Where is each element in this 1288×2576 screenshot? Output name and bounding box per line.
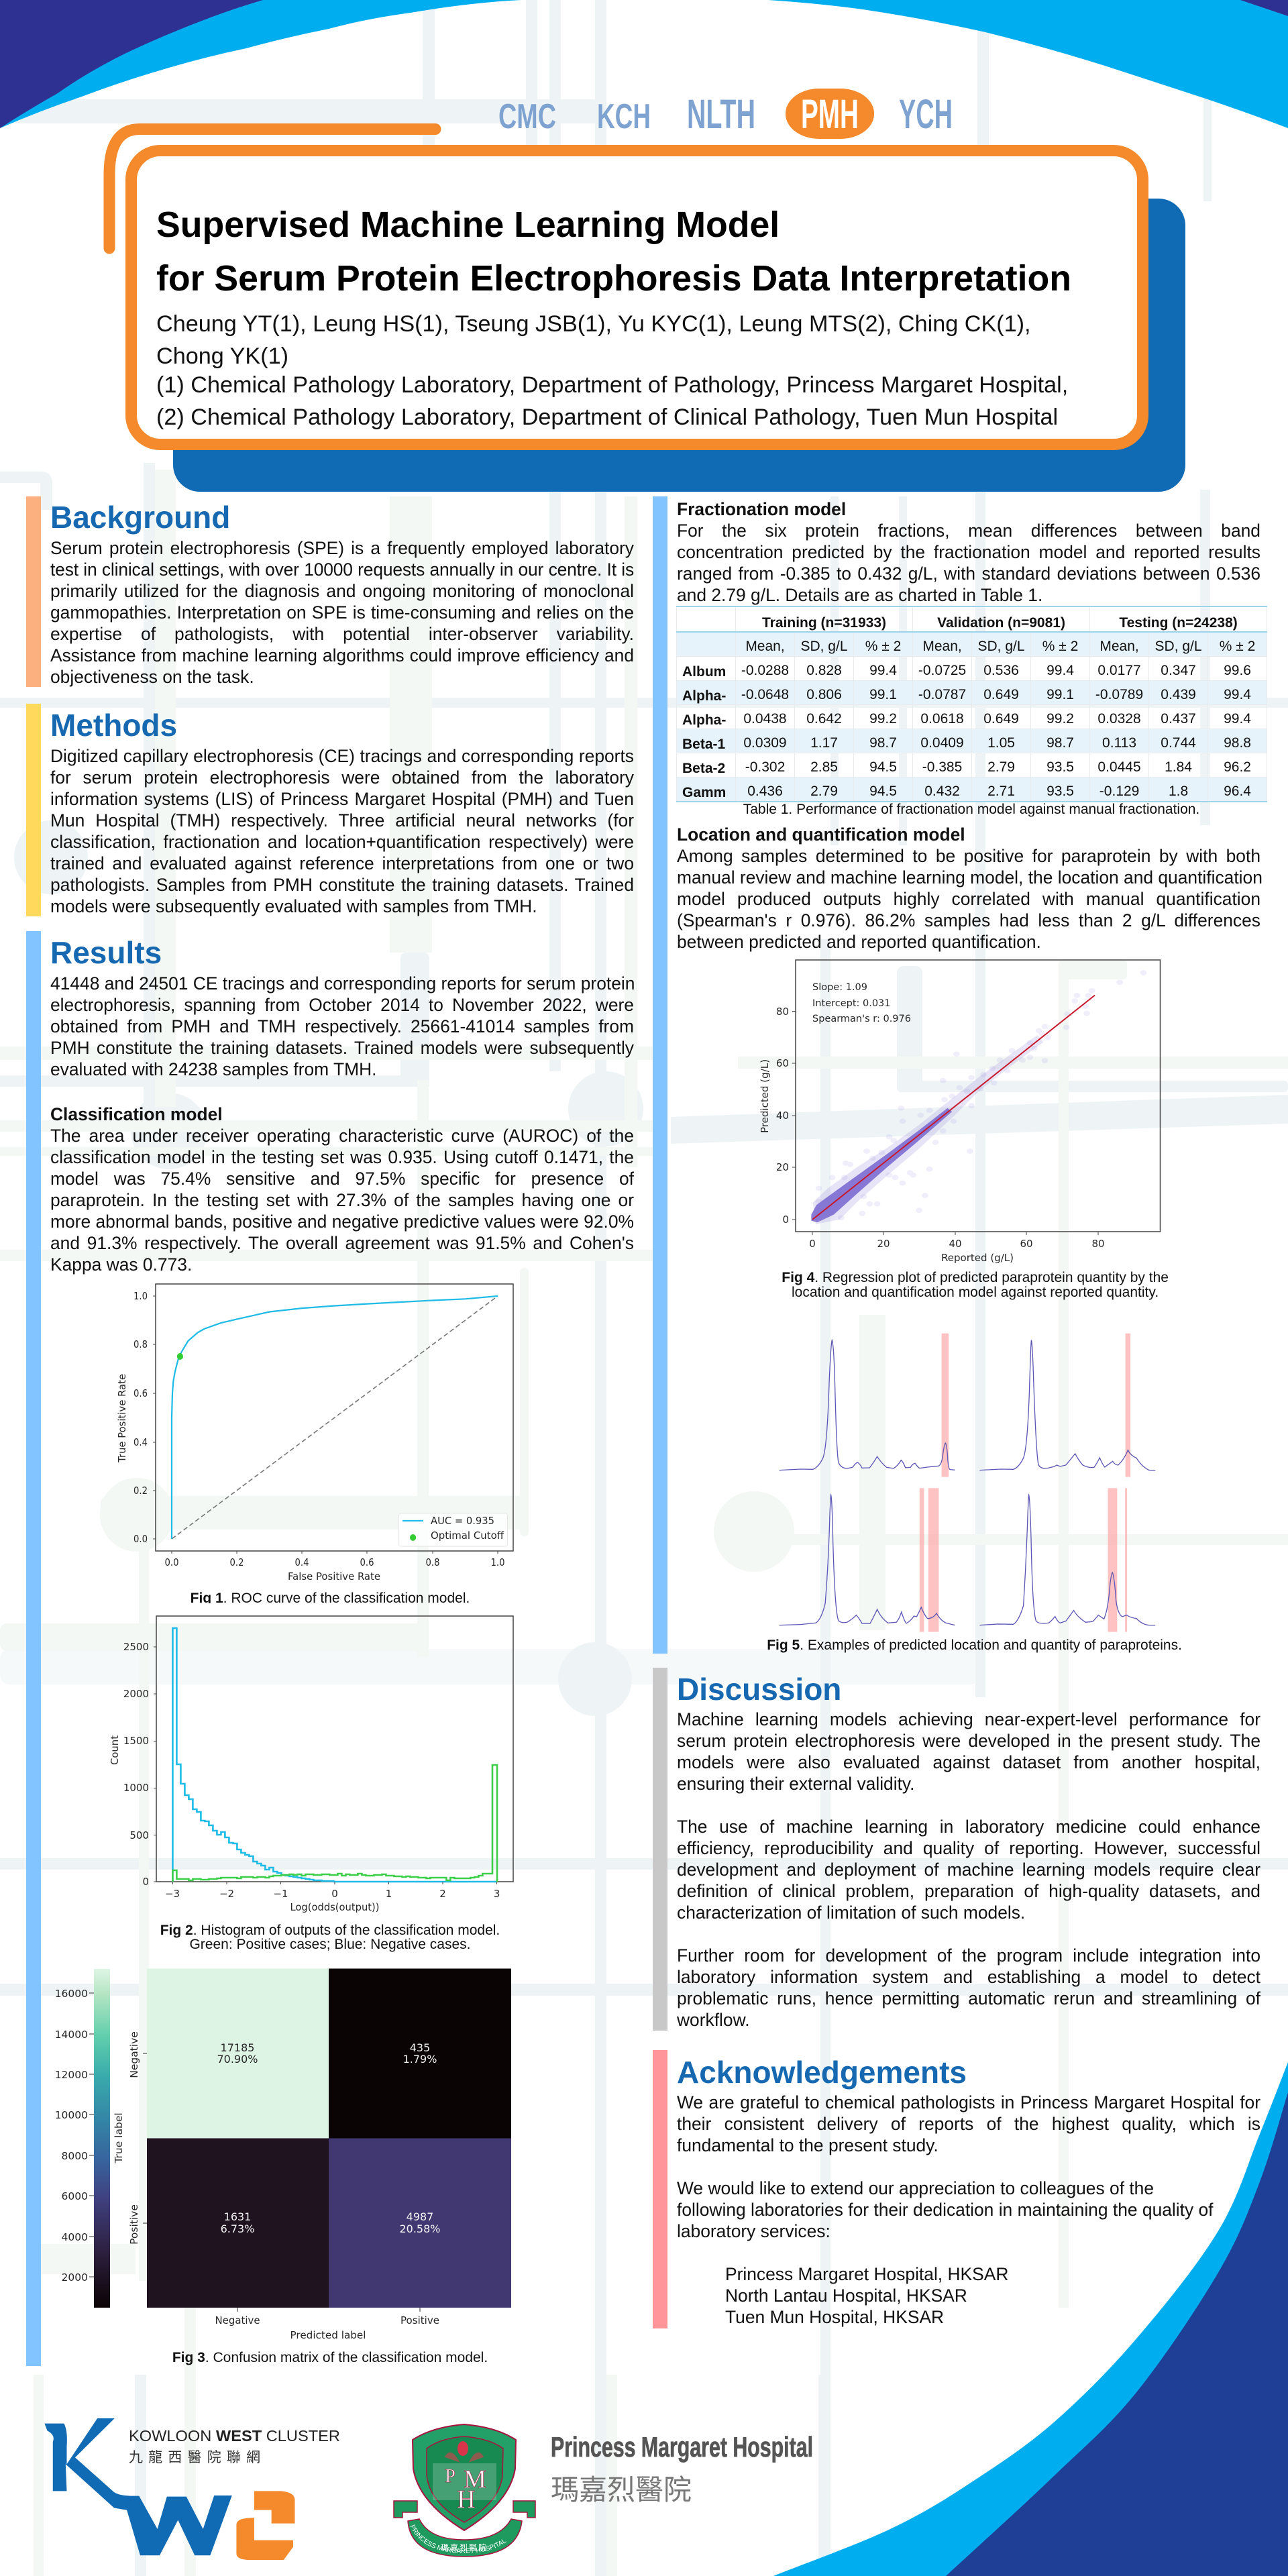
fractionation model text: and 2.79 g/L. Details are as charted in Table 1. — [677, 585, 1042, 605]
logo: Princess Margaret Hospital crest: M — [464, 2465, 486, 2493]
chart: confusion matrix figure 3: Positive — [128, 2204, 140, 2245]
table 1: 99.6 — [1224, 663, 1251, 678]
table 1: 0.0618 — [920, 711, 964, 726]
methods text — [50, 746, 634, 916]
discussion text: efficiency, reproducibility and quality of reporting. However, successful — [677, 1838, 1260, 1858]
background text: test in clinical settings, with over 10000 requests annually in our centre. It is — [50, 559, 634, 580]
table 1: Mean, — [922, 639, 962, 654]
colour bar: 8000 — [62, 2150, 88, 2162]
chart: ROC curve figure 1: True Positive Rate — [116, 1374, 128, 1463]
table 1: SD, g/L — [978, 639, 1025, 654]
acknowledgements text: North Lantau Hospital, HKSAR — [725, 2286, 967, 2306]
chart: histogram figure 2: 2 — [439, 1888, 446, 1900]
table 1: Alpha- — [682, 688, 726, 703]
table 1: 99.1 — [869, 687, 897, 702]
classification model text: more abnormal bands, positive and negative predictive values were 92.0% — [50, 1212, 634, 1232]
chart: regression plot figure 4: 20 — [776, 1161, 789, 1173]
chart: confusion matrix figure 3: True label — [113, 2112, 125, 2164]
discussion text: development and deployment of machine learning models require clear — [677, 1860, 1260, 1880]
chart: regression plot figure 4: 20 — [877, 1238, 890, 1250]
discussion text: The use of machine learning in laboratory medicine could enhance — [677, 1817, 1260, 1837]
chart: ROC curve figure 1: 0.8 — [425, 1556, 440, 1568]
table 1: Mean, — [1099, 639, 1139, 654]
methods text: models were subsequently evaluated with samples from TMH. — [50, 896, 537, 916]
predicted paraprotein bands — [920, 1334, 1130, 1632]
chart: regression plot figure 4 — [759, 959, 1169, 1300]
scatter points — [811, 970, 1146, 1224]
chart: regression plot figure 4: Slope: 1.09 — [812, 982, 867, 993]
fractionation model text: Fractionation model — [677, 499, 846, 519]
colour bar: 16000 — [55, 1988, 88, 2000]
chart: ROC curve figure 1: 0.2 — [229, 1556, 244, 1568]
title — [156, 205, 1071, 299]
logo: Princess Margaret Hospital crest: 瑪嘉烈醫院 — [441, 2542, 488, 2553]
results text: evaluated with 24238 samples from TMH. — [50, 1059, 377, 1079]
table 1: 2.79 — [987, 759, 1015, 774]
chart: confusion matrix figure 3: Negative — [128, 2031, 140, 2078]
table 1: SD, g/L — [1155, 639, 1202, 654]
acknowledgements text: We would like to extend our appreciation to colleagues of the — [677, 2178, 1154, 2198]
table 1 — [676, 606, 1267, 802]
chart: histogram figure 2 — [109, 1615, 514, 1952]
legend: Optimal Cutoff — [431, 1529, 504, 1542]
acknowledgements text: laboratory services: — [677, 2221, 830, 2241]
matrix cells: 70.90% — [217, 2053, 258, 2065]
table 1: 99.2 — [1046, 711, 1074, 726]
logo: Kowloon West Cluster: 九龍西醫院聯網 — [129, 2447, 260, 2467]
table 1: -0.0787 — [918, 687, 966, 702]
panel: methods — [26, 704, 634, 916]
chart: ROC curve figure 1: 0.0 — [165, 1556, 178, 1568]
table 1: 2.85 — [810, 759, 838, 774]
table 1: 1.84 — [1165, 759, 1192, 774]
discussion text: characterization of limitation of such models. — [677, 1902, 1025, 1923]
chart: regression plot figure 4: 40 — [949, 1238, 962, 1250]
caption: Green: Positive cases; Blue: Negative cases. — [189, 1937, 471, 1952]
chart: ROC curve figure 1 — [116, 1283, 514, 1603]
panel: results right — [653, 496, 1267, 1654]
chart: histogram figure 2: 2500 — [123, 1641, 149, 1653]
table 1: 96.4 — [1224, 784, 1251, 798]
ROC line — [172, 1296, 498, 1539]
location and quantification text: manual review and machine learning model, the location and quantification — [677, 867, 1263, 888]
table 1: 0.806 — [806, 687, 842, 702]
affiliations: (2) Chemical Pathology Laboratory, Department of Clinical Pathology, Tuen Mun Hospital — [156, 405, 1058, 430]
hospital navigation tabs: NLTH — [687, 91, 755, 137]
fractionation model text: concentration predicted by the fractionation model and reported results — [677, 542, 1260, 562]
chart: regression plot figure 4: 80 — [776, 1006, 789, 1018]
results text: 41448 and 24501 CE tracings and corresponding reports for serum protein — [50, 973, 635, 994]
discussion text — [677, 1709, 1260, 2030]
chart: regression plot figure 4: Intercept: 0.031 — [812, 998, 891, 1009]
table 1: 0.649 — [983, 711, 1019, 726]
classification model text: and 91.3% respectively. The overall agreement was 91.5% and Cohen's — [50, 1233, 634, 1253]
background text: expertise of pathologists, with potential inter-observer variability. — [50, 624, 634, 644]
blue backing panel behind title — [173, 199, 1185, 492]
title: Supervised Machine Learning Model — [156, 205, 780, 245]
table 1: 1.8 — [1169, 784, 1188, 798]
table 1: 99.4 — [1224, 687, 1251, 702]
chart: ROC curve figure 1: 0.0 — [133, 1533, 148, 1545]
chart: ROC curve figure 1: False Positive Rate — [288, 1570, 380, 1582]
table 1: 0.744 — [1161, 735, 1196, 750]
matrix cells — [147, 1968, 511, 2308]
top-right corner swoosh — [768, 0, 1288, 128]
table 1: Album — [682, 664, 726, 679]
discussion text: laboratory information system and establishing a model to detect — [677, 1967, 1260, 1987]
table 1: 0.432 — [924, 784, 960, 798]
chart: histogram figure 2: Count — [109, 1735, 121, 1765]
logo: Princess Margaret Hospital crest — [393, 2424, 536, 2557]
table 1: -0.302 — [745, 759, 785, 774]
methods text: pathologists. Samples from PMH constitute the training datasets. Trained — [50, 875, 634, 895]
bottom-right corner swoosh — [773, 2062, 1288, 2576]
chart: histogram figure 2: 0 — [142, 1876, 149, 1888]
colour bar: 14000 — [55, 2029, 88, 2041]
table 1: 96.2 — [1224, 759, 1251, 774]
caption: Fig 5. Examples of predicted location and quantity of paraproteins. — [767, 1638, 1182, 1653]
positive cases histogram — [172, 1765, 497, 1882]
table 1: 1.05 — [987, 735, 1015, 750]
table 1: 0.0177 — [1097, 663, 1141, 678]
background text: primarily utilized for the diagnosis and ongoing monitoring of monoclonal — [50, 581, 634, 601]
location and quantification text: (Spearman's r 0.976). 86.2% samples had less than 2 g/L differences — [677, 910, 1260, 930]
location and quantification text: model produced outputs highly correlated with manual quantification — [677, 889, 1260, 909]
table 1: Training (n=31933) — [762, 615, 886, 631]
title panel — [125, 145, 1148, 450]
methods text: for serum protein electrophoresis were obtained from the laboratory — [50, 767, 634, 788]
methods text: Mun Hospital (TMH) respectively. Three artificial neural networks (for — [50, 810, 634, 830]
chart: histogram figure 2: 1500 — [123, 1735, 149, 1747]
table 1: Beta-2 — [682, 761, 725, 775]
fractionation model text: ranged from -0.385 to 0.432 g/L, with standard deviations between 0.536 — [677, 564, 1260, 584]
chart: regression plot figure 4: 0 — [782, 1214, 789, 1226]
heading: acknowledgements: Acknowledgements — [677, 2055, 967, 2090]
table 1: Gamm — [682, 785, 726, 800]
chart: ROC curve figure 1: 0.4 — [295, 1556, 309, 1568]
table 1: Alpha- — [682, 712, 726, 727]
table 1: 99.4 — [1046, 663, 1074, 678]
table 1: 93.5 — [1046, 759, 1074, 774]
classification model text — [50, 1104, 634, 1275]
table 1: -0.129 — [1099, 784, 1139, 798]
discussion text: Further room for development of the program include integration into — [677, 1945, 1260, 1966]
caption — [160, 1923, 500, 1952]
table 1: SD, g/L — [800, 639, 848, 654]
background text — [50, 538, 634, 687]
table 1: 2.79 — [810, 784, 838, 798]
classification model text: The area under receiver operating characteristic curve (AUROC) of the — [50, 1126, 634, 1146]
chart: regression plot figure 4: 80 — [1091, 1238, 1105, 1250]
logo: Kowloon West Cluster — [44, 2418, 340, 2560]
acknowledgements text: We are grateful to chemical pathologists in Princess Margaret Hospital for — [677, 2092, 1260, 2112]
table 1: Testing (n=24238) — [1119, 615, 1238, 631]
table 1: 0.536 — [983, 663, 1019, 678]
chart: histogram figure 2: 500 — [129, 1829, 149, 1841]
table 1: -0.0725 — [918, 663, 966, 678]
classification model text: classification model in the testing set was 0.935. Using cutoff 0.1471, the — [50, 1147, 634, 1167]
fractionation model text: For the six protein fractions, mean differences between band — [677, 521, 1260, 541]
location and quantification text — [677, 824, 1263, 952]
location and quantification text: Location and quantification model — [677, 824, 965, 845]
results text: electrophoresis, spanning from October 2014 to November 2022, were — [50, 995, 634, 1015]
legend: AUC = 0.935 — [431, 1515, 494, 1527]
chart: regression plot figure 4: 60 — [776, 1057, 789, 1069]
chart: regression plot figure 4: Predicted (g/L) — [759, 1059, 771, 1133]
affiliations — [156, 372, 1068, 430]
chart: regression plot figure 4: 40 — [776, 1110, 789, 1122]
table 1: 0.437 — [1161, 711, 1196, 726]
table 1: Beta-1 — [682, 737, 725, 751]
table 1: 0.649 — [983, 687, 1019, 702]
colour bar — [55, 1969, 110, 2308]
classification model text: Kappa was 0.773. — [50, 1254, 192, 1275]
table 1: Mean, — [745, 639, 785, 654]
classification model text: Classification model — [50, 1104, 223, 1124]
chart: ROC curve figure 1: 1.0 — [491, 1556, 504, 1568]
discussion text: definition of clinical problem, preparation of high-quality datasets, and — [677, 1881, 1260, 1901]
chart: histogram figure 2: 2000 — [123, 1688, 149, 1700]
caption: Fig 2. Histogram of outputs of the classification model. — [160, 1923, 500, 1938]
heading: background: Background — [50, 500, 230, 535]
table 1: 0.828 — [806, 663, 842, 678]
heading: discussion: Discussion — [677, 1672, 841, 1707]
panel: discussion — [653, 1668, 1260, 2031]
legend — [398, 1513, 507, 1546]
chart: regression plot figure 4: 60 — [1020, 1238, 1033, 1250]
hospital navigation tabs: PMH — [801, 91, 859, 137]
table 1: 98.7 — [869, 735, 897, 750]
colour bar: 6000 — [62, 2190, 88, 2202]
acknowledgements text: Tuen Mun Hospital, HKSAR — [725, 2307, 944, 2327]
chart: confusion matrix figure 3: Predicted label — [290, 2329, 366, 2341]
table 1: 0.0438 — [743, 711, 787, 726]
table 1: 99.1 — [1046, 687, 1074, 702]
acknowledgements text: Princess Margaret Hospital, HKSAR — [725, 2264, 1008, 2284]
chart: ROC curve figure 1: 0.8 — [133, 1338, 148, 1350]
table 1: % ± 2 — [1042, 639, 1078, 654]
table 1: % ± 2 — [1220, 639, 1255, 654]
acknowledgements text: following laboratories for their dedication in maintaining the quality of — [677, 2200, 1214, 2220]
chart: histogram figure 2: 1000 — [123, 1782, 149, 1794]
chart: confusion matrix figure 3: Positive — [400, 2314, 439, 2326]
classification model text: model was 75.4% sensitive and 97.5% specific for presence of — [50, 1169, 634, 1189]
background text: Assistance from machine learning algorithms could improve efficiency and — [50, 645, 634, 665]
table 1: 0.113 — [1102, 735, 1136, 750]
table 1: -0.385 — [922, 759, 962, 774]
caption: location and quantification model against reported quantity. — [792, 1285, 1159, 1300]
hospital name text — [551, 2432, 813, 2506]
table 1: -0.0648 — [741, 687, 789, 702]
discussion text: models were also evaluated against dataset from another hospital, — [677, 1752, 1260, 1772]
acknowledgements text: fundamental to the present study. — [677, 2135, 938, 2155]
chart: histogram figure 2: 1 — [386, 1888, 392, 1900]
table 1: 0.0409 — [920, 735, 964, 750]
chart: histogram figure 2: Log(odds(output)) — [290, 1901, 380, 1913]
table 1: -0.0789 — [1095, 687, 1143, 702]
caption — [782, 1270, 1169, 1300]
table 1: Validation (n=9081) — [937, 615, 1065, 631]
discussion text: serum protein electrophoresis were developed in the present study. The — [677, 1731, 1260, 1751]
hospital navigation tabs: CMC — [498, 97, 556, 136]
heading: methods: Methods — [50, 708, 177, 743]
colour bar: 10000 — [55, 2109, 88, 2121]
results text: PMH constitute the training datasets. Trained models were subsequently — [50, 1038, 634, 1058]
location and quantification text: Among samples determined to be positive for paraprotein by with both — [677, 846, 1260, 866]
chart: example tracings figure 5 — [767, 1334, 1182, 1653]
authors — [156, 311, 1031, 369]
table 1: 0.642 — [806, 711, 842, 726]
table 1: 94.5 — [869, 784, 897, 798]
matrix cells: 4987 — [407, 2210, 433, 2223]
authors: Cheung YT(1), Leung HS(1), Tseung JSB(1), Yu KYC(1), Leung MTS(2), Ching CK(1), — [156, 311, 1031, 337]
table 1: -0.0288 — [741, 663, 789, 678]
table 1: 99.4 — [869, 663, 897, 678]
table 1: 0.439 — [1161, 687, 1196, 702]
colour bar: 4000 — [62, 2231, 88, 2243]
matrix cells: 435 — [410, 2041, 430, 2054]
chart: histogram figure 2: 0 — [331, 1888, 338, 1900]
table 1: 99.4 — [1224, 711, 1251, 726]
colour bar: 2000 — [62, 2271, 88, 2284]
table 1: 93.5 — [1046, 784, 1074, 798]
table 1: 94.5 — [869, 759, 897, 774]
table 1: % ± 2 — [865, 639, 901, 654]
discussion text: workflow. — [677, 2010, 750, 2030]
discussion text: Machine learning models achieving near-expert-level performance for — [677, 1709, 1260, 1729]
logo: Princess Margaret Hospital crest: H — [457, 2485, 476, 2514]
chart: regression plot figure 4: Spearman's r: 0.976 — [812, 1014, 911, 1024]
matrix cells: 6.73% — [221, 2222, 254, 2235]
table 1: 98.8 — [1224, 735, 1251, 750]
chart: histogram figure 2: −3 — [165, 1888, 180, 1900]
table 1: 2.71 — [987, 784, 1015, 798]
table 1: 98.7 — [1046, 735, 1074, 750]
heading: results: Results — [50, 935, 162, 970]
orange accent stroke — [103, 123, 441, 254]
regression line — [812, 996, 1095, 1220]
panel: results left — [26, 931, 635, 2366]
top-left corner swoosh — [0, 0, 521, 128]
chart: ROC curve figure 1: 0.6 — [133, 1387, 148, 1399]
logo: Princess Margaret Hospital crest: PRINCESS MARGARET HOSPITAL — [411, 2524, 506, 2553]
chart: histogram figure 2: 3 — [494, 1888, 500, 1900]
chart: histogram figure 2: −1 — [273, 1888, 288, 1900]
caption: Fig 3. Confusion matrix of the classification model. — [172, 2350, 488, 2365]
classification model text: paraprotein. In the testing set with 27.3% of the samples having one or — [50, 1190, 634, 1210]
discussion text: problematic runs, hence permitting automatic rerun and streamlining of — [677, 1988, 1260, 2008]
hospital navigation tabs: KCH — [597, 97, 651, 136]
negative cases histogram — [172, 1628, 497, 1882]
table 1: 1.17 — [810, 735, 838, 750]
colour bar: 12000 — [55, 2069, 88, 2081]
chart: confusion matrix figure 3 — [55, 1968, 511, 2365]
matrix cells: 17185 — [221, 2041, 254, 2054]
table 1: 99.2 — [869, 711, 897, 726]
methods text: trained and evaluated against reference interpretations from one or two — [50, 853, 634, 873]
panel: acknowledgements — [653, 2050, 1260, 2328]
background text: gammopathies. Interpretation on SPE is time-consuming and relies on the — [50, 602, 634, 623]
panel: background — [26, 496, 634, 687]
logo: Princess Margaret Hospital crest: P — [445, 2466, 455, 2487]
matrix cells: 1631 — [224, 2210, 251, 2223]
results text — [50, 973, 635, 1079]
title: for Serum Protein Electrophoresis Data Interpretation — [156, 258, 1071, 299]
fractionation model text — [677, 499, 1260, 605]
chart: ROC curve figure 1: 0.6 — [360, 1556, 374, 1568]
methods text: information systems (LIS) of Princess Margaret Hospital (PMH) and Tuen — [50, 789, 634, 809]
table 1: 0.347 — [1161, 663, 1196, 678]
matrix cells: 20.58% — [399, 2222, 441, 2235]
acknowledgements text: their consistent delivery of reports of the highest quality, which is — [677, 2114, 1260, 2134]
methods text: Digitized capillary electrophoresis (CE) tracings and corresponding reports — [50, 746, 634, 766]
hospital navigation tabs — [498, 89, 953, 139]
acknowledgements text — [677, 2092, 1260, 2327]
tracings — [780, 1340, 1155, 1625]
table 1: 0.0328 — [1097, 711, 1141, 726]
table caption: Table 1. Performance of fractionation model against manual fractionation. — [743, 802, 1199, 817]
methods text: classification, fractionation and location+quantification respectively) were — [50, 832, 634, 852]
chart: histogram figure 2: −2 — [219, 1888, 234, 1900]
chart: ROC curve figure 1: 0.2 — [133, 1485, 148, 1497]
chart: confusion matrix figure 3: Negative — [215, 2314, 260, 2326]
background text: Serum protein electrophoresis (SPE) is a frequently employed laboratory — [50, 538, 634, 558]
table 1: 0.436 — [747, 784, 783, 798]
discussion text: ensuring their external validity. — [677, 1774, 915, 1794]
table 1: 0.0309 — [743, 735, 787, 750]
matrix cells: 1.79% — [403, 2053, 437, 2065]
authors: Chong YK(1) — [156, 343, 288, 369]
table 1: 0.0445 — [1097, 759, 1141, 774]
chart: ROC curve figure 1: 1.0 — [133, 1290, 148, 1302]
caption: Fig 4. Regression plot of predicted paraprotein quantity by the — [782, 1270, 1169, 1285]
affiliations: (1) Chemical Pathology Laboratory, Department of Pathology, Princess Margaret Hospital, — [156, 372, 1068, 398]
location and quantification text: between predicted and reported quantification. — [677, 932, 1041, 952]
logo: Kowloon West Cluster: KOWLOON WEST CLUSTER — [129, 2427, 340, 2445]
results text: obtained from PMH and TMH respectively. 25661-41014 samples from — [50, 1016, 634, 1036]
chart: regression plot figure 4: Reported (g/L) — [941, 1252, 1014, 1264]
background text: objectiveness on the task. — [50, 667, 254, 687]
chart: ROC curve figure 1: 0.4 — [133, 1436, 148, 1448]
chart: regression plot figure 4: 0 — [809, 1238, 816, 1250]
